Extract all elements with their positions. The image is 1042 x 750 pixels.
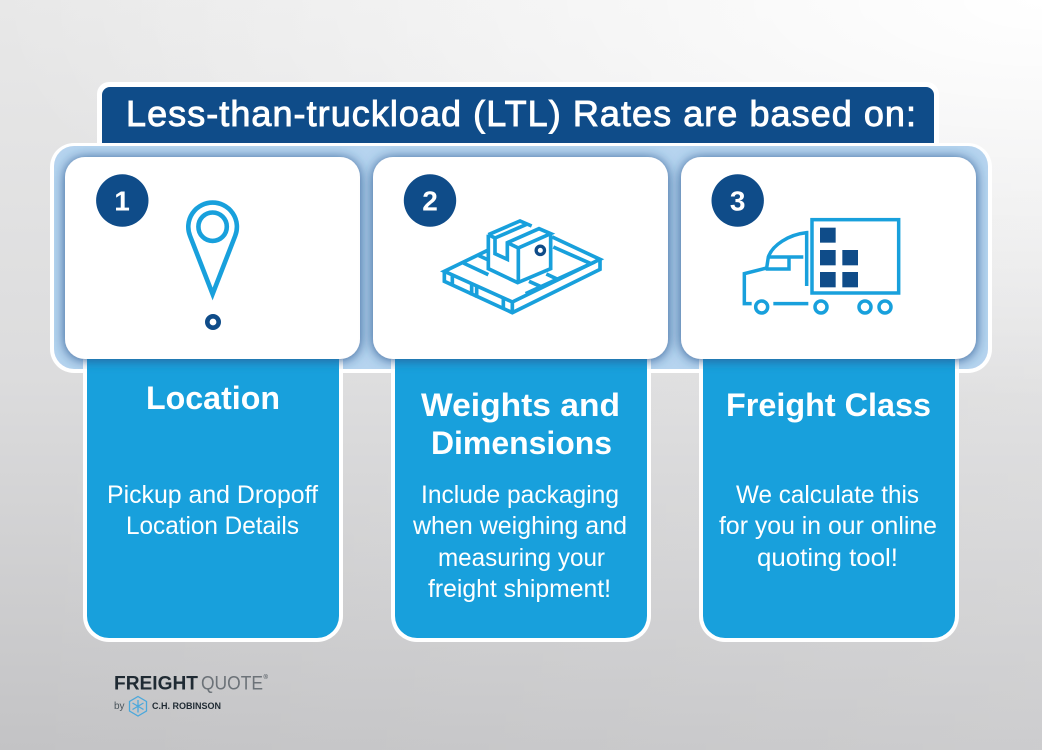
logo: Freightquote by C.H. Robinson	[114, 674, 268, 716]
text: quoting tool note	[719, 481, 937, 572]
logo: Freightquote by C.H. Robinson: ®	[264, 674, 268, 681]
logo: Freightquote by C.H. Robinson: by	[114, 701, 125, 712]
logo: Freightquote by C.H. Robinson: FREIGHT	[114, 674, 198, 694]
logo: Freightquote by C.H. Robinson: C.H. ROBINSON	[152, 701, 221, 711]
title banner	[97, 82, 939, 150]
text: quoting tool note: We calculate this	[736, 481, 919, 509]
number badge 3: 3	[730, 186, 745, 216]
title: Less-than-truckload (LTL) Rates are based on:	[126, 93, 916, 134]
icon: box on pallet	[444, 221, 600, 313]
number badge 2	[404, 174, 456, 227]
column: weights and dimensions	[391, 355, 651, 642]
text: packaging note: freight shipment!	[428, 575, 611, 603]
icon: truck	[744, 220, 899, 313]
text: packaging note: when weighing and	[412, 512, 627, 540]
number badge 3	[712, 174, 764, 227]
logo: Freightquote by C.H. Robinson: QUOTE	[201, 674, 263, 694]
text: quoting tool note: quoting tool!	[757, 544, 898, 572]
card 2	[373, 157, 668, 359]
card 1	[65, 157, 360, 359]
heading: weights and dimensions: Weights and	[421, 387, 620, 423]
card 3	[681, 157, 976, 359]
text: location details: Pickup and Dropoff	[107, 481, 318, 509]
heading: freight class: Freight Class	[726, 387, 931, 423]
text: packaging note	[412, 481, 627, 603]
icon: location pin	[188, 203, 237, 328]
text: location details	[107, 481, 318, 540]
heading: location: Location	[146, 380, 280, 416]
column: location	[83, 355, 343, 642]
white cards	[65, 157, 976, 359]
blue column tops over the band	[83, 355, 959, 375]
text: location details: Location Details	[126, 512, 299, 540]
number badge 2: 2	[422, 186, 438, 216]
text: packaging note: measuring your	[438, 544, 605, 572]
text: quoting tool note: for you in our online	[719, 512, 937, 540]
panel: light blue band	[50, 143, 992, 373]
text: packaging note: Include packaging	[421, 481, 619, 509]
icon: hexagon mark	[130, 696, 146, 716]
column: freight class	[699, 355, 959, 642]
heading: weights and dimensions: Dimensions	[431, 425, 612, 461]
number badge 1	[96, 174, 148, 227]
number badge 1: 1	[114, 186, 130, 216]
heading: weights and dimensions	[421, 387, 620, 461]
